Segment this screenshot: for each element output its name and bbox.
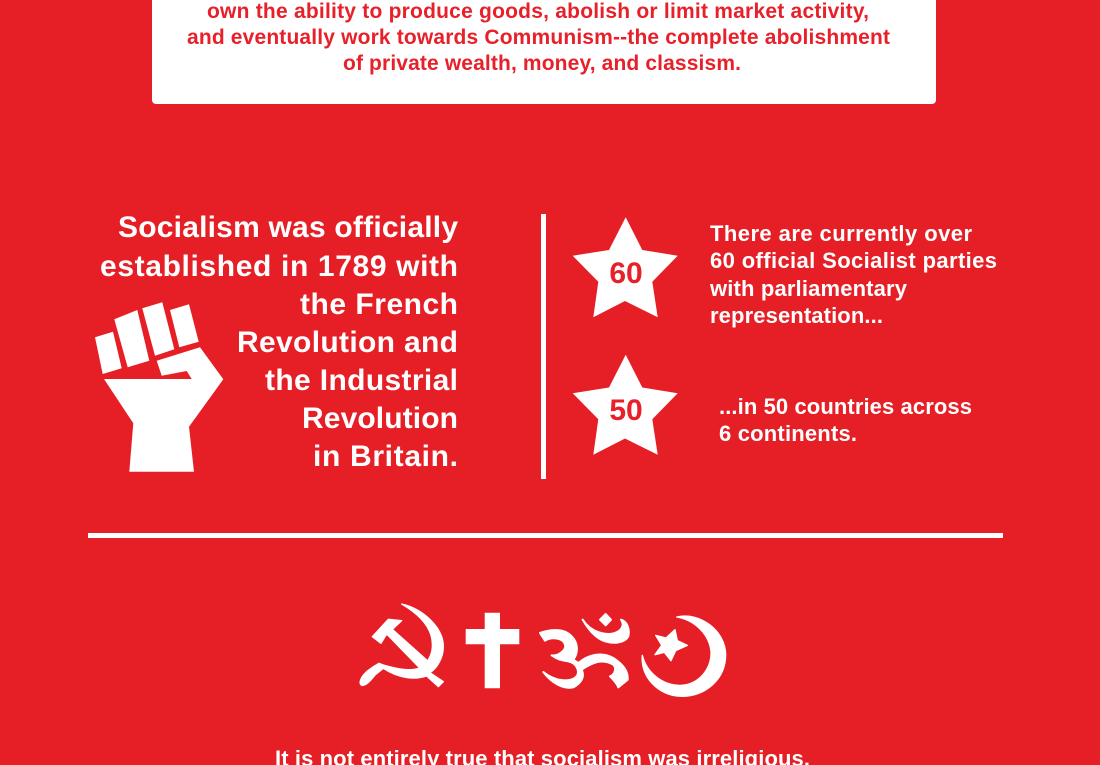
text block: socialist parties: There are currently over	[710, 221, 972, 246]
heading: origin of socialism: Socialism was officially	[118, 211, 458, 244]
icon: star and crescent	[642, 616, 726, 696]
text block: definition: own the ability to produce goods, abolish or limit market activity,	[207, 0, 869, 23]
text block: definition: and eventually work towards Communism--the complete abolishment	[187, 26, 890, 49]
heading: origin of socialism: Revolution and	[237, 326, 458, 359]
icon: hammer and sickle	[360, 604, 443, 687]
heading: origin of socialism: in Britain.	[313, 440, 458, 473]
heading: origin of socialism: Revolution	[302, 402, 458, 435]
text block: definition: of private wealth, money, and classism.	[343, 52, 741, 75]
icon: om	[540, 614, 629, 688]
heading: origin of socialism	[100, 211, 458, 473]
heading: origin of socialism: the French	[300, 288, 458, 321]
icon: star 60: 60	[609, 257, 643, 290]
text block: countries	[719, 394, 972, 446]
divider: horizontal rule	[88, 533, 1003, 538]
text block: socialist parties	[709, 221, 997, 328]
heading: origin of socialism: established in 1789 with	[100, 250, 458, 283]
text block: countries: ...in 50 countries across	[719, 394, 972, 419]
heading: origin of socialism: the Industrial	[265, 364, 458, 397]
icon: star 50	[573, 355, 678, 455]
icon: star 50: 50	[609, 394, 643, 427]
icon: raised fist	[95, 302, 223, 472]
icon row: belief symbols	[360, 604, 726, 696]
divider: vertical rule	[541, 214, 546, 479]
text block: socialist parties: 60 official Socialist parties	[710, 248, 997, 273]
text block: definition	[187, 0, 890, 75]
text block: socialist parties: representation...	[710, 303, 883, 328]
panel: definition callout	[152, 0, 936, 104]
icon: star 60	[573, 217, 678, 317]
text block: countries: 6 continents.	[719, 421, 857, 446]
text block: socialist parties: with parliamentary	[709, 276, 908, 301]
icon: cross	[466, 613, 519, 688]
